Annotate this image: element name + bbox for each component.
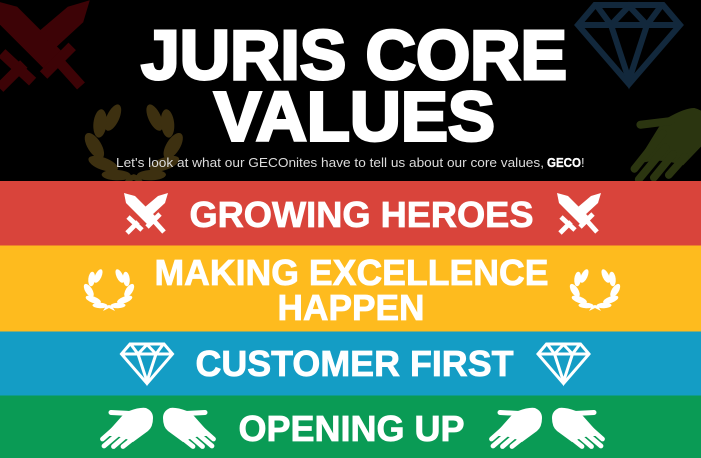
- heading: customer first: CUSTOMER FIRST: [196, 343, 514, 384]
- icon: hands left: [102, 408, 214, 446]
- title: [141, 16, 567, 156]
- icon: faded crossed swords: [0, 0, 90, 88]
- icon: hands right: [492, 408, 602, 446]
- icon: faded diamond: [578, 5, 680, 84]
- icon: faded open hand: [626, 106, 701, 181]
- icon: crossed swords left: [124, 193, 168, 233]
- heading: making excellence happen: MAKING EXCELLENCE: [154, 252, 548, 293]
- background: black header: [0, 0, 701, 181]
- panel: growing heroes: [0, 181, 701, 246]
- subtitle: Let's look at what our GECOnites have to tell us about our core values,: [116, 155, 544, 170]
- heading: making excellence happen: [154, 252, 548, 328]
- panel: opening up: [0, 396, 701, 458]
- heading: opening up: OPENING UP: [238, 408, 464, 449]
- icon: crossed swords right: [557, 193, 601, 233]
- panel: making excellence happen: [0, 246, 701, 332]
- icon: laurel wreath right: [568, 268, 622, 311]
- title: JURIS CORE: [141, 16, 567, 94]
- subtitle: !: [581, 155, 585, 170]
- icon: faded laurel wreath: [81, 102, 187, 186]
- panel: customer first: [0, 332, 701, 396]
- title: VALUES: [214, 78, 495, 156]
- heading: making excellence happen: HAPPEN: [278, 287, 424, 328]
- subtitle: GECO: [547, 155, 581, 170]
- icon: diamond left: [122, 344, 172, 384]
- heading: growing heroes: GROWING HEROES: [190, 194, 534, 235]
- icon: diamond right: [538, 344, 589, 384]
- icon: laurel wreath left: [82, 268, 136, 311]
